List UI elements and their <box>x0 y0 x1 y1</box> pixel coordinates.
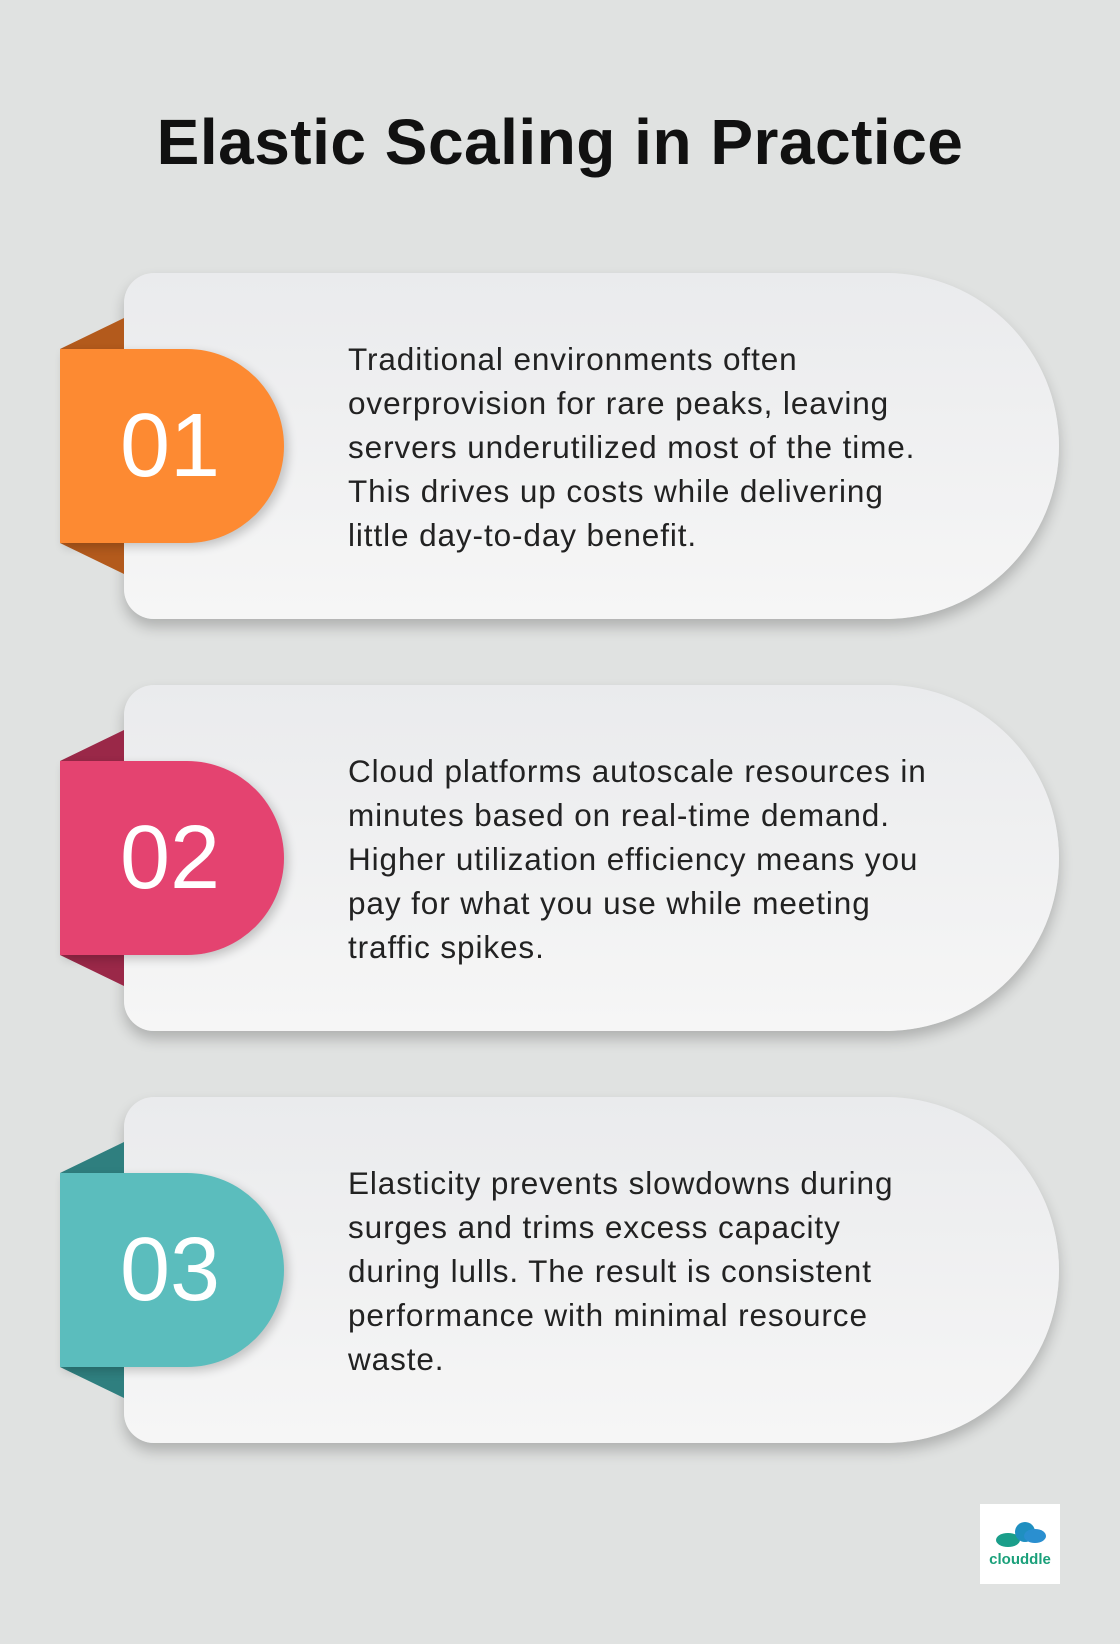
text 02: pay for what you use while meeting <box>348 885 871 921</box>
panel: step 03 <box>60 1097 1065 1458</box>
text 02: Higher utilization efficiency means you <box>348 841 918 877</box>
card 02 <box>124 685 1059 1031</box>
text 02 <box>348 753 927 965</box>
text 02: minutes based on real-time demand. <box>348 797 890 833</box>
text 01: servers underutilized most of the time. <box>348 429 915 465</box>
text 03: waste. <box>348 1341 444 1377</box>
text 03 <box>348 1165 893 1377</box>
logo: clouddle <box>989 1551 1051 1568</box>
text 03: performance with minimal resource <box>348 1297 868 1333</box>
text 03: surges and trims excess capacity <box>348 1209 841 1245</box>
card 01 <box>124 273 1059 619</box>
logo <box>980 1504 1060 1584</box>
text 02: traffic spikes. <box>348 929 545 965</box>
text 01: This drives up costs while delivering <box>348 473 884 509</box>
panel: step 02 <box>60 685 1065 1046</box>
card 03 <box>124 1097 1059 1443</box>
text 01: overprovision for rare peaks, leaving <box>348 385 889 421</box>
badge 03 <box>60 1173 284 1367</box>
title: Elastic Scaling in Practice <box>157 106 963 178</box>
badge 02 <box>60 761 284 955</box>
flap 01 <box>60 318 124 574</box>
flap 02 <box>60 730 124 986</box>
text 02: Cloud platforms autoscale resources in <box>348 753 927 789</box>
panel: step 01 <box>60 273 1065 634</box>
badge 02: 02 <box>120 808 220 908</box>
text 01 <box>348 341 915 553</box>
badge 01 <box>60 349 284 543</box>
text 01: Traditional environments often <box>348 341 798 377</box>
text 03: Elasticity prevents slowdowns during <box>348 1165 893 1201</box>
flap 03 <box>60 1142 124 1398</box>
text 01: little day-to-day benefit. <box>348 517 697 553</box>
badge 01: 01 <box>120 396 220 496</box>
text 03: during lulls. The result is consistent <box>348 1253 872 1289</box>
badge 03: 03 <box>120 1220 220 1320</box>
